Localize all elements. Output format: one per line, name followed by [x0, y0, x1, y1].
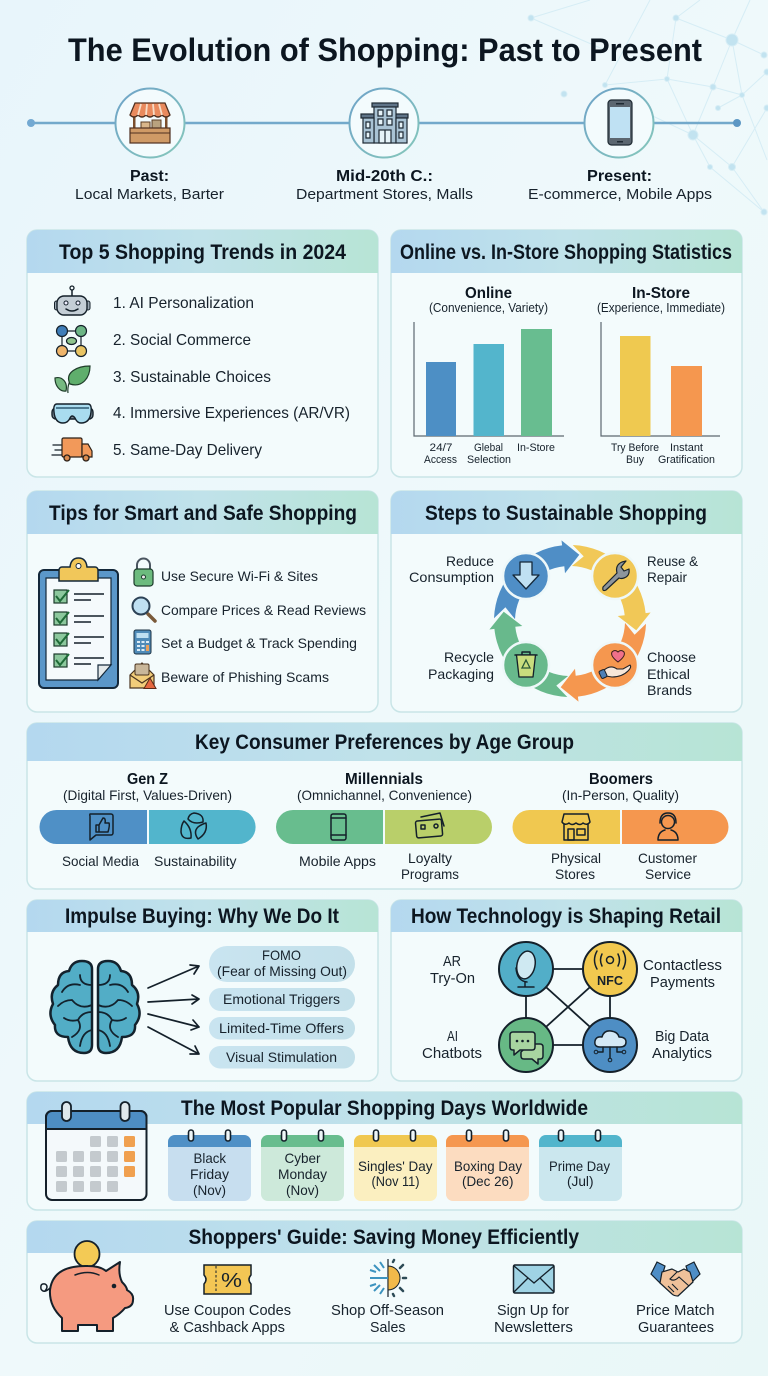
step: ethical brands: Brands — [647, 682, 692, 698]
tip: coupons: % — [221, 1270, 242, 1292]
icon: social network — [56, 326, 86, 356]
panel: online vs in-store — [391, 230, 742, 477]
online chart: In-Store — [517, 442, 555, 454]
past label: Local Markets, Barter — [75, 186, 224, 203]
step: recycle packaging: Recycle — [444, 649, 494, 665]
past label — [75, 168, 224, 203]
present label: Present: — [587, 168, 652, 185]
node: NFC payments: Contactless — [643, 957, 722, 974]
card: singles day: (Nov 11) — [372, 1173, 420, 1189]
step: reduce — [409, 553, 549, 599]
group: boomers: Stores — [555, 866, 595, 882]
group: boomers: (In-Person, Quality) — [562, 787, 679, 803]
cause: limited-time offers — [209, 1017, 355, 1040]
tip 1: Use Secure Wi-Fi & Sites — [161, 568, 318, 584]
timeline — [27, 88, 741, 203]
step: reuse and repair: Reuse & — [647, 553, 699, 569]
online chart: Glebal — [474, 442, 503, 454]
tip: coupons — [164, 1265, 291, 1336]
tip: newsletters — [494, 1265, 573, 1336]
step: reuse and repair — [592, 553, 699, 599]
card: black friday: Friday — [190, 1166, 229, 1182]
in-store chart: In-Store — [632, 285, 690, 302]
mid-20th century label: Department Stores, Malls — [296, 186, 473, 203]
group: millennials: Programs — [401, 866, 459, 882]
icon: leaves — [55, 366, 90, 393]
heading: Top 5 Shopping Trends in 2024 — [59, 241, 346, 264]
group: gen z — [40, 771, 256, 869]
present stage — [528, 88, 712, 203]
panel: sustainable steps — [391, 491, 742, 712]
group: gen z: Gen Z — [127, 771, 168, 788]
in-store chart: Instant — [670, 442, 703, 454]
node: AR try-on — [430, 942, 553, 996]
tip: coupons: & Cashback Apps — [170, 1319, 285, 1336]
heading: Tips for Smart and Safe Shopping — [49, 502, 357, 525]
icon: department store — [361, 103, 408, 143]
icon: phishing envelope — [130, 663, 156, 688]
icon: market stall — [130, 103, 170, 143]
tip: off-season: Sales — [370, 1319, 406, 1336]
trend 1: 1. AI Personalization — [113, 295, 254, 312]
group: boomers: Service — [645, 866, 691, 882]
node: NFC payments: Payments — [650, 974, 715, 991]
cause: limited-time offers: Limited-Time Offers — [219, 1020, 344, 1036]
mid-20th century label: Mid-20th C.: — [336, 168, 433, 185]
card: boxing day — [446, 1130, 529, 1201]
panel: shopping days — [27, 1092, 742, 1210]
icon: brain — [50, 961, 140, 1053]
heading: Key Consumer Preferences by Age Group — [195, 731, 574, 754]
icon: padlock — [134, 558, 153, 586]
node: AI chatbots: AI — [447, 1028, 458, 1045]
card: black friday: Black — [194, 1150, 227, 1166]
in-store chart: (Experience, Immediate) — [597, 301, 725, 315]
card: cyber monday: (Nov) — [286, 1182, 319, 1198]
present label — [528, 168, 712, 203]
group: millennials: (Omnichannel, Convenience) — [297, 787, 472, 803]
icon: delivery truck — [52, 438, 92, 461]
cause: emotional triggers — [209, 988, 355, 1011]
online chart: Online — [465, 285, 512, 302]
step: recycle packaging — [428, 642, 549, 688]
node: AI chatbots: Chatbots — [422, 1045, 482, 1062]
tip 4: Beware of Phishing Scams — [161, 669, 329, 685]
node: NFC payments: NFC — [597, 974, 623, 988]
trend 3: 3. Sustainable Choices — [113, 369, 271, 386]
online chart: Access — [424, 454, 457, 466]
heading: The Most Popular Shopping Days Worldwide — [181, 1097, 588, 1120]
step: reduce: Reduce — [446, 553, 494, 569]
online chart — [414, 285, 564, 466]
past stage — [75, 88, 224, 203]
tip: coupons: Use Coupon Codes — [164, 1302, 291, 1319]
group: gen z: Sustainability — [154, 853, 236, 869]
icon: recycle leaves — [181, 813, 206, 839]
heading: Shoppers' Guide: Saving Money Efficiently — [188, 1226, 579, 1249]
node: big data — [583, 1018, 712, 1072]
panel: top 5 trends — [27, 230, 378, 477]
present label: E-commerce, Mobile Apps — [528, 186, 712, 203]
network decoration — [528, 0, 768, 215]
icon: loyalty cards — [415, 813, 444, 838]
icon: robot — [54, 286, 90, 315]
cause: visual stimulation — [209, 1046, 355, 1068]
icon: customer service — [658, 813, 678, 840]
icon: calculator — [134, 630, 151, 654]
panel: smart shopping tips — [27, 491, 378, 712]
step: ethical brands: Choose — [647, 649, 696, 665]
group: gen z: Social Media — [62, 853, 139, 869]
step: reduce: Consumption — [409, 569, 494, 585]
icon: magnifier — [132, 598, 155, 621]
panel: technology in retail — [391, 900, 742, 1081]
online chart: (Convenience, Variety) — [429, 301, 548, 315]
card: black friday — [168, 1130, 251, 1201]
in-store chart: Gratification — [658, 454, 715, 466]
group: millennials: Millennials — [345, 771, 423, 788]
card: boxing day: (Dec 26) — [462, 1173, 514, 1189]
in-store chart — [597, 285, 725, 466]
mid-20th century label — [296, 168, 473, 203]
online chart: Selection — [467, 454, 511, 466]
icon: smartphone — [608, 100, 632, 145]
panel: impulse buying — [27, 900, 378, 1081]
tip: off-season: Shop Off-Season — [331, 1302, 444, 1319]
step: ethical brands: Ethical — [647, 666, 690, 682]
trend 4: 4. Immersive Experiences (AR/VR) — [113, 405, 350, 422]
heading: Impulse Buying: Why We Do It — [65, 905, 339, 928]
in-store chart: Buy — [626, 454, 644, 466]
tip: price match: Price Match — [636, 1302, 714, 1319]
group: gen z: (Digital First, Values-Driven) — [63, 787, 232, 803]
step: reuse and repair: Repair — [647, 569, 687, 585]
group: millennials: Loyalty — [408, 850, 452, 866]
trend 5: 5. Same-Day Delivery — [113, 442, 262, 459]
group: boomers — [512, 771, 728, 882]
title: The Evolution of Shopping: Past to Present — [68, 32, 702, 68]
cause: fomo: FOMO — [262, 947, 301, 963]
node: AI chatbots — [422, 1018, 553, 1072]
card: prime day — [539, 1130, 622, 1201]
group: millennials — [276, 771, 492, 882]
card: singles day — [354, 1130, 437, 1201]
card: prime day: (Jul) — [567, 1173, 594, 1189]
cause: visual stimulation: Visual Stimulation — [226, 1049, 337, 1065]
arrows — [148, 965, 199, 1054]
icon: phone — [331, 814, 346, 840]
card: prime day: Prime Day — [549, 1158, 610, 1174]
mid-20th century stage — [296, 88, 473, 203]
node: big data: Analytics — [652, 1045, 712, 1062]
icon: calendar — [46, 1102, 146, 1200]
card: black friday: (Nov) — [193, 1182, 226, 1198]
group: millennials: Mobile Apps — [299, 853, 376, 869]
cause: fomo — [209, 946, 355, 982]
trend 2: 2. Social Commerce — [113, 332, 251, 349]
tip: newsletters: Sign Up for — [497, 1302, 569, 1319]
card: cyber monday: Cyber — [284, 1150, 321, 1166]
cycle arrows — [489, 540, 651, 702]
icon: AR goggles — [52, 404, 93, 423]
group: boomers: Physical — [551, 850, 601, 866]
icon: piggy bank — [41, 1241, 133, 1331]
panel: preferences by age — [27, 723, 742, 889]
tip 3: Set a Budget & Track Spending — [161, 635, 357, 651]
icon: clipboard checklist — [39, 558, 118, 688]
cause: fomo: (Fear of Missing Out) — [217, 963, 347, 979]
tip 2: Compare Prices & Read Reviews — [161, 602, 366, 618]
past label: Past: — [130, 168, 169, 185]
tip: newsletters: Newsletters — [494, 1319, 573, 1336]
card: singles day: Singles' Day — [358, 1158, 432, 1174]
step: recycle packaging: Packaging — [428, 666, 494, 682]
tip: price match: Guarantees — [638, 1319, 714, 1336]
card: cyber monday — [261, 1130, 344, 1201]
cause: emotional triggers: Emotional Triggers — [223, 991, 340, 1007]
heading: How Technology is Shaping Retail — [411, 905, 721, 928]
icon: store — [562, 814, 590, 840]
in-store chart: Try Before — [611, 442, 659, 454]
heading: Steps to Sustainable Shopping — [425, 502, 707, 525]
icon: thumbs up bubble — [90, 814, 113, 840]
online chart: 24/7 — [430, 442, 452, 454]
node: NFC payments — [583, 942, 722, 996]
network links — [526, 969, 610, 1045]
group: boomers: Boomers — [589, 771, 653, 788]
group: boomers: Customer — [638, 850, 697, 866]
card: boxing day: Boxing Day — [454, 1158, 522, 1174]
step: ethical brands — [592, 642, 696, 698]
node: AR try-on: AR — [443, 953, 461, 970]
node: big data: Big Data — [655, 1028, 710, 1045]
tip: off-season — [331, 1259, 444, 1336]
panel: saving money guide — [27, 1221, 742, 1343]
card: cyber monday: Monday — [278, 1166, 327, 1182]
node: AR try-on: Try-On — [430, 970, 475, 987]
tip: price match — [636, 1262, 714, 1336]
